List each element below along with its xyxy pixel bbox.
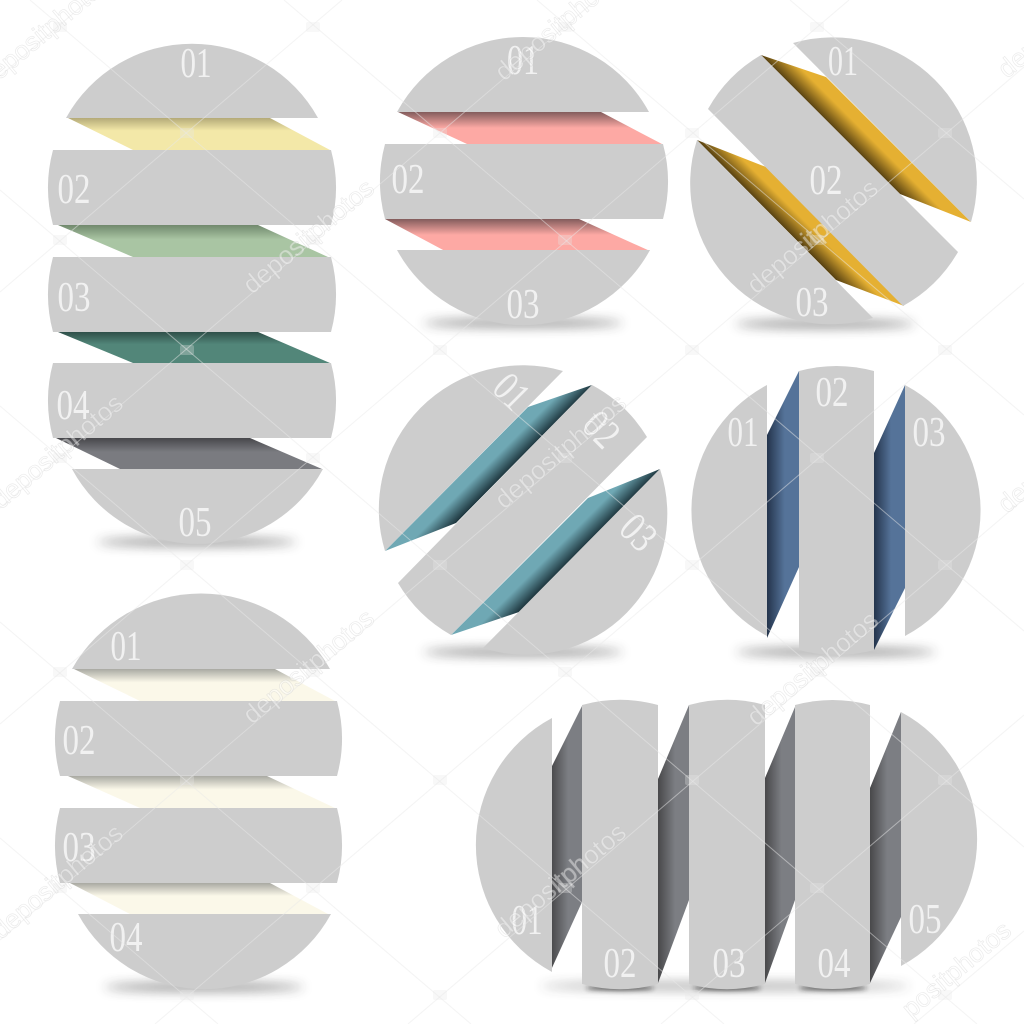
numbers: 02 <box>810 158 842 204</box>
fold: cream 3 <box>70 883 328 914</box>
segment 03 <box>397 250 650 325</box>
numbers: 02 <box>816 370 848 416</box>
group: three-step gold diagonal circle <box>690 37 977 328</box>
numbers <box>483 364 666 561</box>
band 03 <box>55 808 342 883</box>
numbers: 03 <box>796 280 828 326</box>
fold: teal upper <box>385 385 592 551</box>
group: five-step grey vertical circle <box>476 700 977 990</box>
segment 01 <box>72 594 330 669</box>
shadow <box>736 648 936 656</box>
numbers: 03 <box>912 410 946 456</box>
group: three-step pink circle <box>380 37 668 328</box>
numbers: 03 <box>712 941 746 987</box>
segment 01 <box>793 37 977 222</box>
band 02 <box>380 144 668 219</box>
numbers <box>392 38 540 328</box>
band 02 <box>48 150 336 225</box>
fold: blue right <box>874 385 905 650</box>
shadow: under band 03 <box>693 986 761 990</box>
fold: teal lower <box>451 469 660 635</box>
segment 04 <box>78 914 331 989</box>
band 03 <box>48 257 336 332</box>
numbers: 01 <box>828 39 858 85</box>
shadow: wide <box>540 982 910 990</box>
numbers <box>56 41 212 546</box>
numbers: 02 <box>58 167 90 213</box>
segment 03 <box>905 385 981 636</box>
watermark: text: depositphotos <box>741 173 884 300</box>
watermark: text: depositphotos <box>237 603 380 730</box>
segment 03 <box>483 469 667 655</box>
band 02 <box>708 55 958 306</box>
numbers <box>512 897 942 987</box>
band 04 <box>48 363 336 438</box>
shadow <box>104 983 304 991</box>
fold: grey 2 <box>658 705 689 983</box>
numbers <box>796 39 858 326</box>
shadow: under band 02 <box>586 986 654 990</box>
segment 01 <box>379 365 563 551</box>
numbers: 01 <box>180 41 212 87</box>
segment 03 <box>690 140 873 324</box>
group: five-step horizontal circle <box>48 41 336 546</box>
numbers: 01 <box>110 624 142 670</box>
segment 01 <box>66 44 318 118</box>
fold: teal <box>58 332 330 363</box>
watermark: text: depositphotos <box>489 388 632 515</box>
numbers: 04 <box>110 915 142 961</box>
segment 05 <box>72 469 323 544</box>
fold: cream 1 <box>74 669 335 701</box>
fold: grey 3 <box>765 707 795 983</box>
fold: pink lower <box>385 219 650 251</box>
fold: gold lower <box>697 140 904 306</box>
shadow <box>423 648 623 656</box>
fold: grey 4 <box>870 712 901 983</box>
fold: green <box>58 225 328 257</box>
numbers: 03 <box>610 505 666 561</box>
fold: blue left <box>767 371 799 638</box>
watermark: text: depositphotos <box>741 605 884 732</box>
numbers <box>62 624 142 961</box>
numbers: 01 <box>728 410 758 456</box>
segment 05 <box>901 712 977 966</box>
segment 01 <box>397 37 649 112</box>
numbers <box>728 370 946 456</box>
numbers: 01 <box>512 898 542 944</box>
numbers: 02 <box>573 402 629 458</box>
numbers: 03 <box>58 275 90 321</box>
watermark: text: positphotos <box>896 915 1017 1023</box>
fold: dark grey <box>56 438 322 469</box>
band 03 <box>689 700 765 989</box>
segment 01 <box>476 718 552 972</box>
shadow <box>97 538 297 546</box>
numbers: 02 <box>392 157 424 203</box>
shadow <box>423 319 623 327</box>
numbers: 03 <box>62 825 96 871</box>
numbers: 03 <box>506 282 540 328</box>
band 02 <box>55 701 342 776</box>
numbers: 04 <box>818 941 850 987</box>
group: three-step teal diagonal circle <box>379 364 667 656</box>
watermark: text: depositphotos <box>489 817 632 944</box>
band 04 <box>795 700 870 989</box>
segment 01 <box>691 385 767 636</box>
shadow: under band 04 <box>799 986 867 990</box>
fold: pink upper <box>398 112 662 144</box>
band 02 <box>799 366 874 655</box>
band 02 <box>398 385 647 635</box>
numbers: 05 <box>178 500 212 546</box>
shadow <box>735 320 915 328</box>
fold: yellow <box>68 118 330 150</box>
watermark: text: depositphotos <box>237 173 380 300</box>
fold: cream 2 <box>68 776 335 808</box>
band 02 <box>582 700 658 989</box>
numbers: 02 <box>62 718 96 764</box>
numbers: 04 <box>56 383 90 429</box>
group: four-step cream circle <box>55 594 342 991</box>
fold: grey 1 <box>551 706 582 970</box>
fold: gold upper <box>761 55 971 222</box>
numbers: 01 <box>507 38 539 84</box>
group: three-step blue vertical circle <box>691 366 981 656</box>
numbers: 01 <box>483 364 539 420</box>
numbers: 05 <box>908 897 942 943</box>
numbers: 02 <box>604 941 636 987</box>
